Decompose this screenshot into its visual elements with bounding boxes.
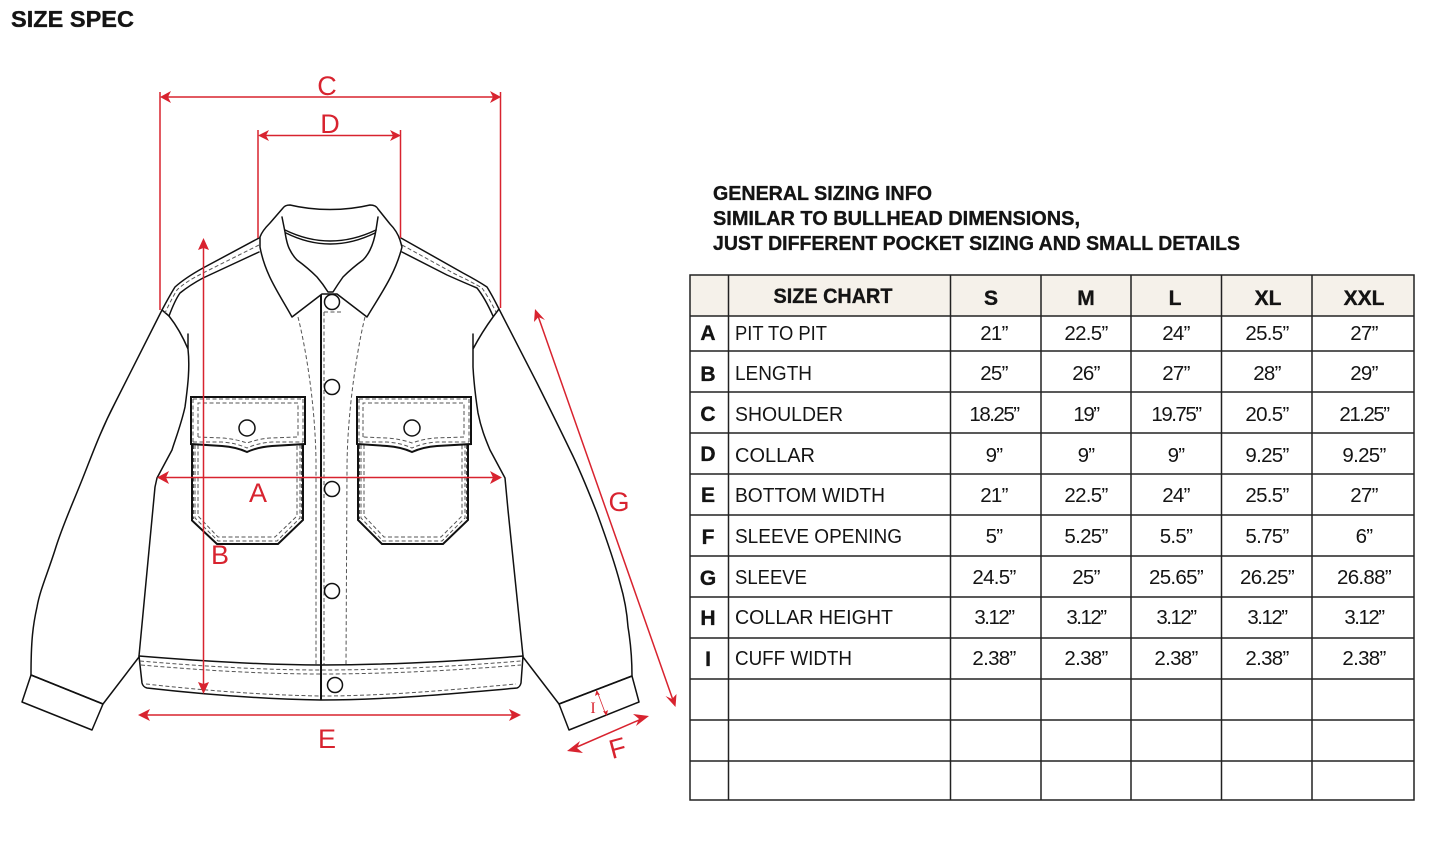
row H: collar height: 3.12”: [1344, 606, 1385, 629]
row C: shoulder: 21.25”: [1339, 403, 1390, 426]
measurement I: cuff width: [590, 690, 608, 717]
table header row: XXL: [1344, 287, 1385, 310]
row F: sleeve opening: 5.75”: [1245, 525, 1289, 548]
row I: cuff width: 2.38”: [1342, 647, 1386, 670]
row F: sleeve opening: 6”: [1356, 525, 1373, 548]
row F: sleeve opening: 5.25”: [1064, 525, 1108, 548]
row I: cuff width: I: [705, 648, 711, 671]
row C: shoulder: C: [700, 403, 716, 426]
row A: pit to pit: 27”: [1350, 322, 1379, 345]
measurement F: sleeve opening: F: [606, 732, 630, 765]
row D: collar: 9.25”: [1342, 444, 1386, 467]
row F: sleeve opening: F: [702, 526, 715, 549]
row A: pit to pit: PIT TO PIT: [735, 322, 827, 345]
row B: length: 25”: [980, 362, 1009, 385]
right sleeve: [499, 309, 632, 704]
measurement I: cuff width: I: [590, 700, 596, 717]
row B: length: 28”: [1253, 362, 1282, 385]
row G: sleeve: G: [700, 567, 716, 590]
table header row: M: [1077, 287, 1095, 310]
measurement E: bottom width: [138, 709, 521, 754]
size chart table: [690, 275, 1414, 800]
row B: length: LENGTH: [735, 362, 812, 385]
row B: length: [700, 362, 1379, 386]
row A: pit to pit: 24”: [1162, 322, 1191, 345]
measurement B: length: B: [211, 540, 229, 570]
measurement C: shoulder: [160, 71, 501, 310]
row A: pit to pit: A: [700, 322, 716, 345]
row C: shoulder: SHOULDER: [735, 403, 843, 426]
general sizing info: [713, 182, 1240, 255]
row I: cuff width: 2.38”: [1064, 647, 1108, 670]
row F: sleeve opening: SLEEVE OPENING: [735, 525, 902, 548]
left sleeve: [31, 310, 162, 704]
row D: collar: 9”: [1168, 444, 1185, 467]
row G: sleeve: [700, 566, 1392, 590]
row D: collar: [700, 443, 1386, 467]
row E: bottom width: 24”: [1162, 484, 1191, 507]
row H: collar height: 3.12”: [1156, 606, 1197, 629]
placket buttons: [324, 294, 342, 692]
row F: sleeve opening: [702, 525, 1373, 549]
general sizing info: SIMILAR TO BULLHEAD DIMENSIONS,: [713, 207, 1080, 230]
row H: collar height: 3.12”: [1066, 606, 1107, 629]
row C: shoulder: [700, 403, 1390, 426]
row E: bottom width: 27”: [1350, 484, 1379, 507]
row H: collar height: 3.12”: [974, 606, 1015, 629]
table header background: [690, 275, 1414, 316]
jacket technical drawing: [22, 205, 639, 730]
row D: collar: D: [700, 443, 716, 466]
row A: pit to pit: [700, 322, 1379, 345]
table header row: L: [1169, 287, 1182, 310]
placket stitching: [298, 295, 365, 700]
row G: sleeve: 24.5”: [972, 566, 1016, 589]
table header row: [774, 285, 1385, 310]
measurement C: shoulder: C: [317, 71, 337, 101]
row A: pit to pit: 22.5”: [1064, 322, 1108, 345]
measurement F: sleeve opening: [567, 714, 649, 765]
measurement A: pit to pit: A: [249, 478, 267, 508]
measurement B: length: [198, 238, 229, 694]
row H: collar height: H: [700, 607, 716, 630]
table header row: S: [984, 287, 998, 310]
row A: pit to pit: 21”: [980, 322, 1009, 345]
measurement G: sleeve: G: [608, 487, 630, 517]
measurement A: pit to pit: [157, 471, 502, 508]
general sizing info: GENERAL SIZING INFO: [713, 182, 932, 205]
row I: cuff width: 2.38”: [972, 647, 1016, 670]
row E: bottom width: 22.5”: [1064, 484, 1108, 507]
row E: bottom width: 21”: [980, 484, 1009, 507]
row E: bottom width: BOTTOM WIDTH: [735, 484, 885, 507]
row G: sleeve: 25.65”: [1149, 566, 1204, 589]
right chest pocket: [357, 397, 471, 544]
row H: collar height: [700, 606, 1385, 630]
measurement D: collar: D: [320, 109, 340, 139]
table grid: [690, 275, 1414, 800]
measurement G: sleeve: [534, 309, 676, 707]
jacket body outline: [139, 238, 523, 656]
row E: bottom width: 25.5”: [1245, 484, 1289, 507]
table header row: XL: [1255, 287, 1282, 310]
row F: sleeve opening: 5.5”: [1160, 525, 1193, 548]
measurement D: collar: [258, 109, 401, 238]
row D: collar: 9.25”: [1245, 444, 1289, 467]
row C: shoulder: 18.25”: [969, 403, 1020, 426]
row D: collar: 9”: [1078, 444, 1095, 467]
collar: [260, 205, 402, 317]
row A: pit to pit: 25.5”: [1245, 322, 1289, 345]
yoke seams: [165, 245, 496, 316]
row G: sleeve: 26.25”: [1240, 566, 1295, 589]
row I: cuff width: CUFF WIDTH: [735, 647, 852, 670]
row D: collar: 9”: [986, 444, 1003, 467]
row B: length: 29”: [1350, 362, 1379, 385]
left cuff: [22, 675, 103, 730]
table header row: SIZE CHART: [774, 285, 893, 308]
row C: shoulder: 19.75”: [1151, 403, 1202, 426]
row C: shoulder: 20.5”: [1245, 403, 1289, 426]
row I: cuff width: [705, 647, 1386, 671]
title: SIZE SPEC: [11, 6, 134, 32]
row E: bottom width: [701, 484, 1379, 507]
row E: bottom width: E: [701, 484, 715, 507]
row I: cuff width: 2.38”: [1245, 647, 1289, 670]
row B: length: 27”: [1162, 362, 1191, 385]
right cuff: [559, 676, 639, 730]
row G: sleeve: 25”: [1072, 566, 1101, 589]
general sizing info: JUST DIFFERENT POCKET SIZING AND SMALL DETAILS: [713, 232, 1240, 255]
row B: length: 26”: [1072, 362, 1101, 385]
row G: sleeve: 26.88”: [1337, 566, 1392, 589]
row H: collar height: COLLAR HEIGHT: [735, 606, 893, 629]
measurement E: bottom width: E: [318, 724, 336, 754]
row G: sleeve: SLEEVE: [735, 566, 807, 589]
hem band: [139, 656, 523, 700]
row F: sleeve opening: 5”: [986, 525, 1003, 548]
row B: length: B: [700, 363, 716, 386]
row I: cuff width: 2.38”: [1154, 647, 1198, 670]
row C: shoulder: 19”: [1073, 403, 1100, 426]
row D: collar: COLLAR: [735, 444, 815, 467]
left chest pocket: [191, 397, 305, 544]
row H: collar height: 3.12”: [1247, 606, 1288, 629]
